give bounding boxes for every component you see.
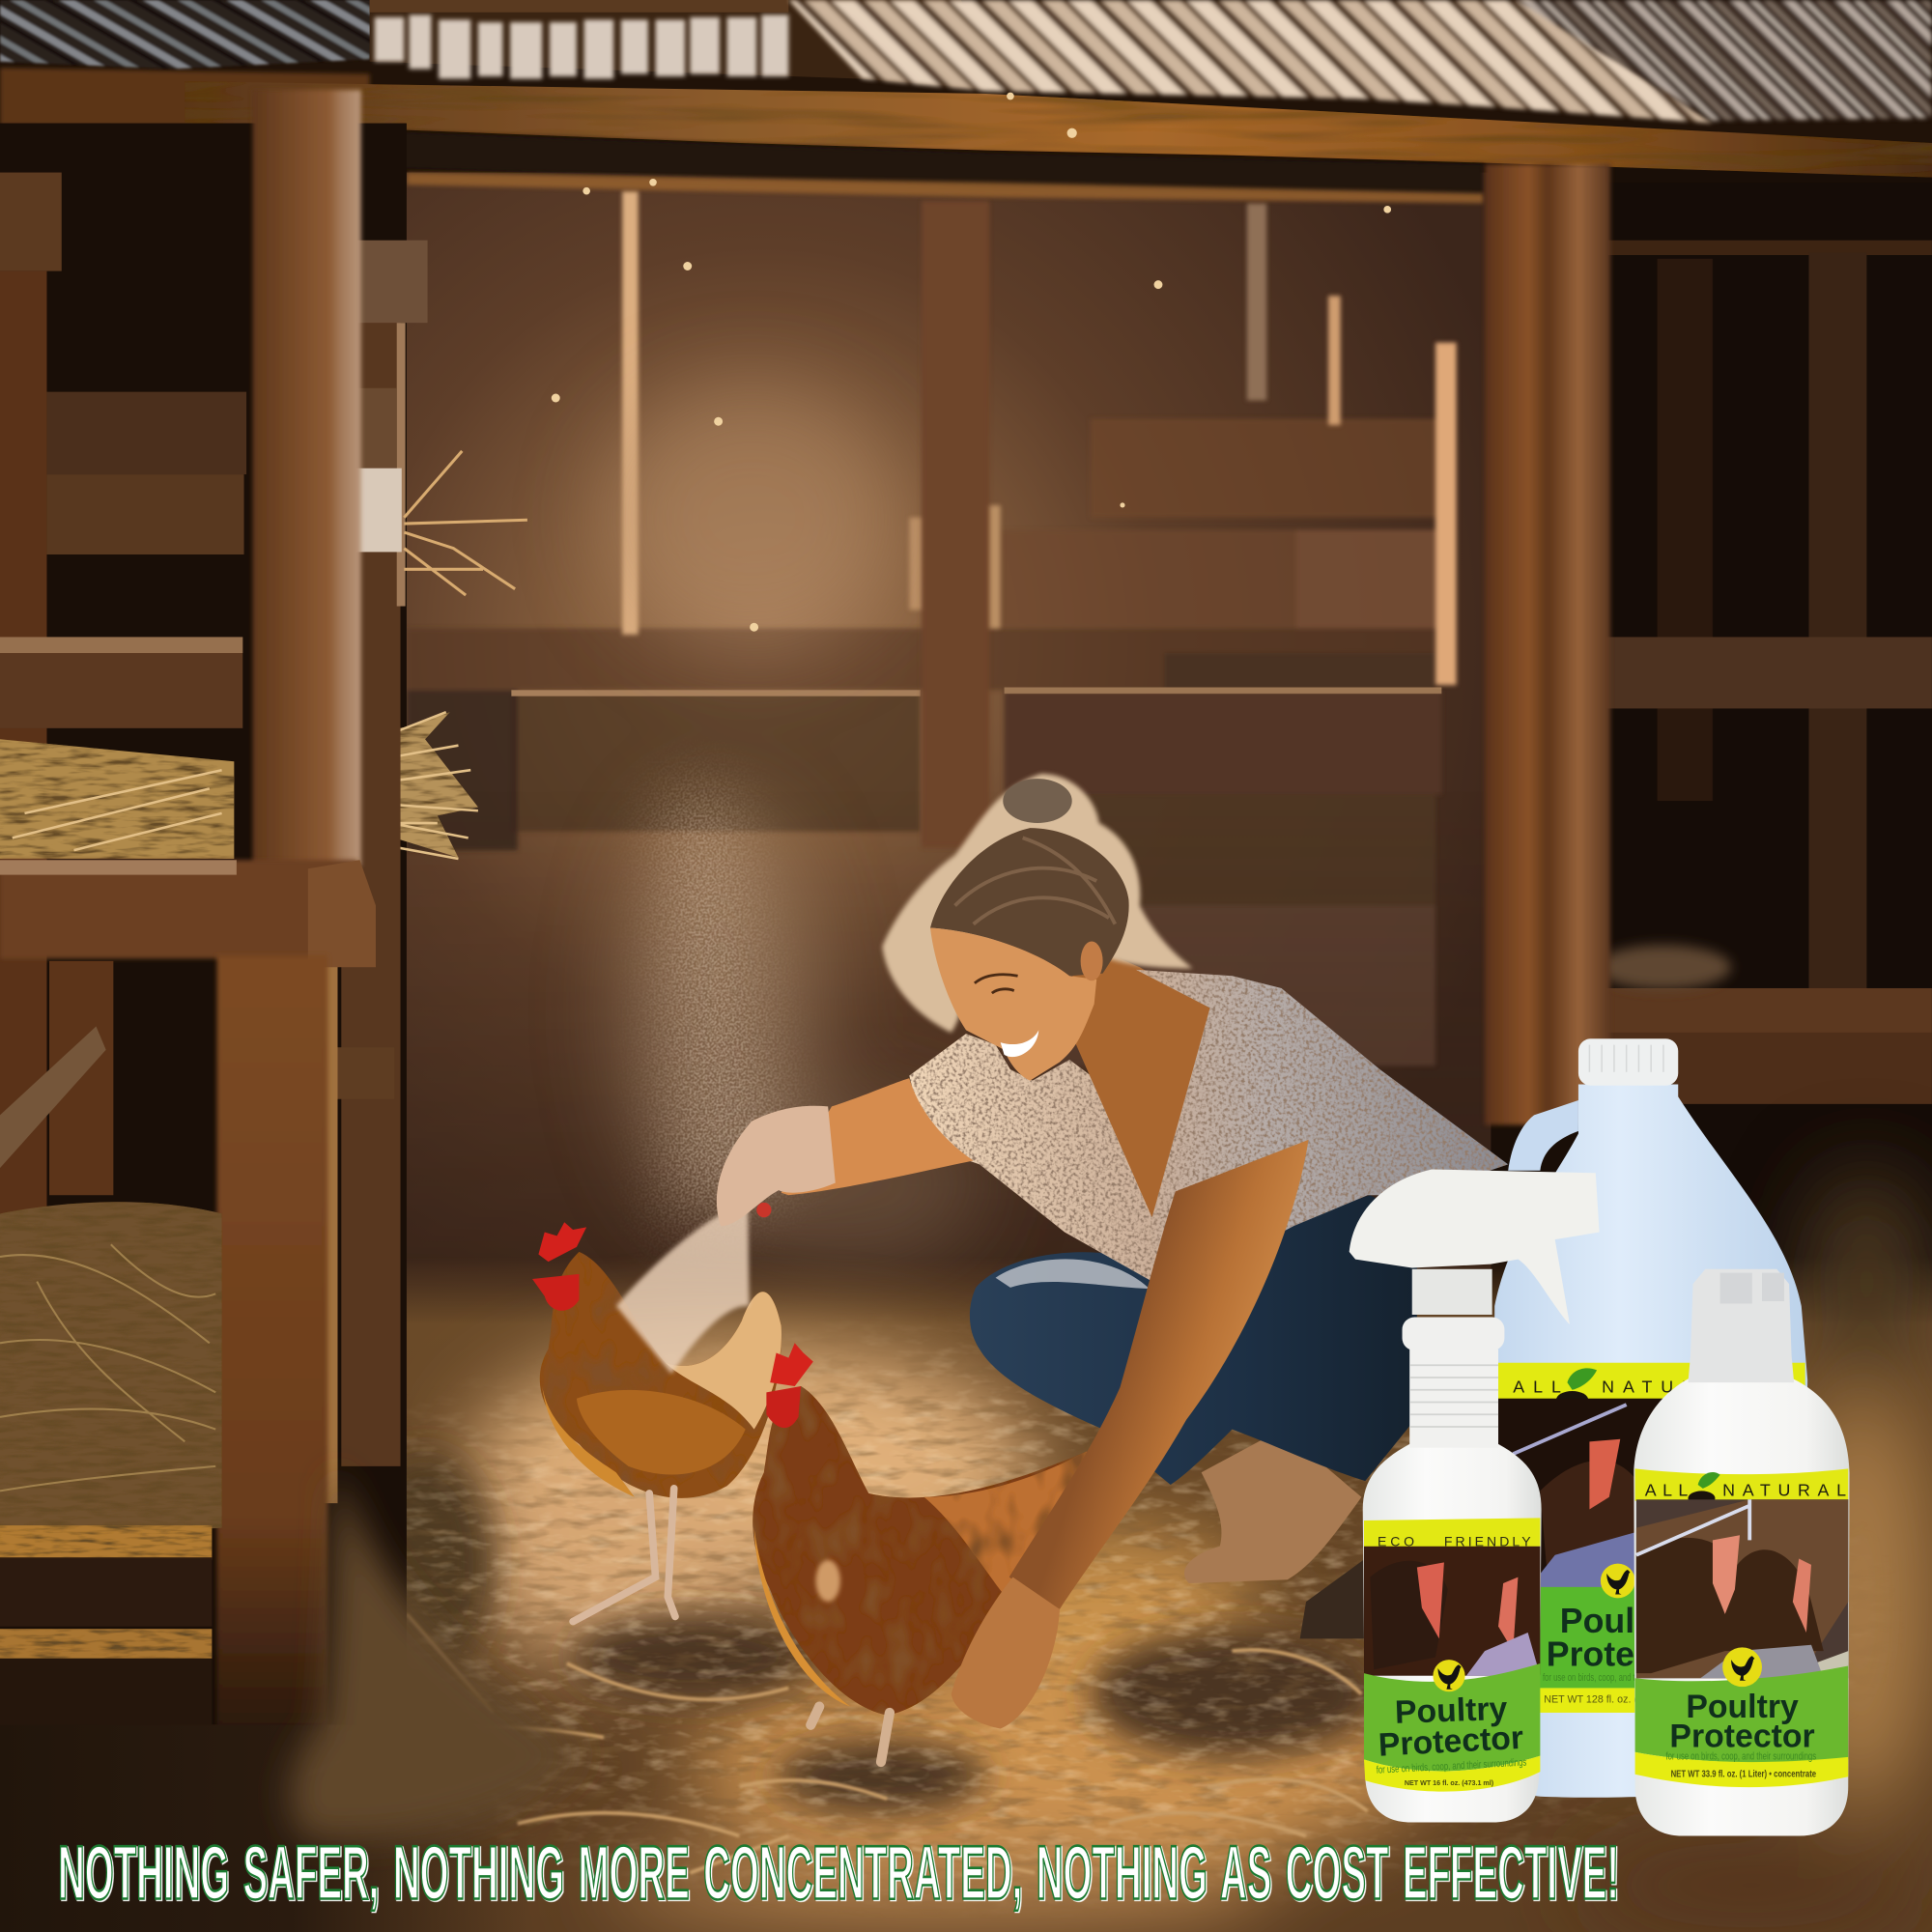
hair strands highlight — [955, 838, 1115, 924]
hay on upper shelf — [0, 712, 478, 859]
chicken: rear hen — [532, 1222, 781, 1622]
jug yellow band — [1494, 1363, 1805, 1408]
bottle green label: Poultry — [1686, 1689, 1799, 1725]
bottle green label: for use on birds, coop, and their surroundings — [1665, 1750, 1816, 1762]
soft dust glow — [604, 382, 985, 1269]
fine spray dust cloud — [666, 788, 788, 1233]
chicken: front hen — [753, 1343, 1087, 1762]
spray green label — [1364, 1663, 1540, 1792]
right post — [1485, 164, 1610, 1125]
bottle photo: two hens — [1636, 1499, 1848, 1678]
dark stall floor shadow — [0, 1725, 529, 1932]
rear left post — [323, 241, 428, 1503]
spray green label: Protector — [1378, 1719, 1524, 1764]
main foreground post — [0, 90, 376, 1731]
diagonal rail — [0, 1026, 106, 1168]
woman — [717, 774, 1508, 1729]
spray green label: Poultry — [1394, 1690, 1508, 1731]
gloved hand — [717, 1106, 836, 1226]
boots — [1184, 1430, 1365, 1638]
bottle yellow band: ALL — [1645, 1480, 1694, 1499]
lower hand — [952, 1577, 1060, 1729]
jug cap — [1578, 1038, 1678, 1086]
lower hay pile — [291, 1466, 579, 1838]
spray yellow band — [1364, 1518, 1540, 1552]
jug yellow band: ALL — [1513, 1377, 1570, 1396]
light shafts through wall gaps — [622, 191, 1688, 685]
spray body — [1363, 1444, 1542, 1822]
spray hen badge — [1433, 1660, 1465, 1691]
backlit hair halo — [882, 774, 1193, 1033]
neck and chest skin — [1069, 949, 1213, 1220]
bottle green label — [1635, 1665, 1848, 1787]
hair — [930, 828, 1129, 976]
trigger head — [1350, 1169, 1600, 1324]
bottle cap — [1688, 1269, 1794, 1382]
jug photo label — [1497, 1399, 1805, 1592]
right barn opening — [1497, 183, 1932, 1316]
bottle green label: NET WT 33.9 fl. oz. (1 Liter) • concentrate — [1671, 1769, 1817, 1779]
jug hen badge — [1601, 1564, 1635, 1598]
shirt — [909, 970, 1508, 1288]
ear — [1081, 941, 1103, 980]
back wall with planks — [401, 173, 1491, 1331]
spray mist — [616, 1202, 750, 1374]
loose straw strands — [308, 1614, 1368, 1873]
straw sprig — [404, 451, 527, 595]
roof thatch — [0, 0, 1932, 124]
jeans — [970, 1195, 1417, 1485]
spark particles — [552, 93, 1391, 632]
smile — [1001, 1030, 1038, 1057]
jug green label: for use on birds, coop, and their surroundings — [1543, 1672, 1693, 1684]
hay bale — [0, 1202, 222, 1732]
centre post — [922, 201, 989, 848]
jug green label: Poultry — [1560, 1602, 1679, 1640]
spray photo: two hens — [1364, 1547, 1540, 1676]
jug green label: Protector — [1547, 1634, 1700, 1673]
product: one litre bottle — [1634, 1269, 1854, 1836]
product: spray bottle — [1350, 1169, 1600, 1822]
left barn stall structure — [0, 124, 407, 1725]
reaching arm — [1009, 1140, 1309, 1609]
jug green label — [1497, 1587, 1805, 1713]
extended arm — [781, 1078, 974, 1195]
spray green label: for use on birds, coop, and their surroundings — [1377, 1757, 1527, 1776]
eye and brow — [975, 975, 1018, 993]
red cuff — [756, 1203, 771, 1217]
knee highlight — [996, 1259, 1150, 1289]
bottle green label: Protector — [1669, 1719, 1815, 1755]
roof beam — [0, 49, 1932, 203]
spray green label: NET WT 16 fl. oz. (473.1 ml) — [1405, 1779, 1494, 1787]
threaded neck — [1403, 1269, 1504, 1448]
jug handle — [1508, 1100, 1578, 1171]
bottle yellow band — [1635, 1468, 1854, 1506]
spray yellow band: FRIENDLY — [1444, 1534, 1534, 1549]
spray yellow band: ECO — [1378, 1534, 1418, 1549]
jug body — [1494, 1084, 1807, 1798]
bottle hen badge — [1722, 1647, 1762, 1687]
product: gallon jug — [1494, 1038, 1807, 1798]
bottle yellow band: NATURAL — [1722, 1480, 1854, 1499]
hair bun — [1003, 779, 1072, 823]
jug yellow band: NATURAL — [1602, 1377, 1742, 1396]
jug green label: NET WT 128 fl. oz. (1 Gallon) — [1544, 1694, 1680, 1706]
straw floor — [0, 1171, 1932, 1932]
face — [930, 927, 1096, 1081]
bottle body — [1634, 1378, 1850, 1836]
